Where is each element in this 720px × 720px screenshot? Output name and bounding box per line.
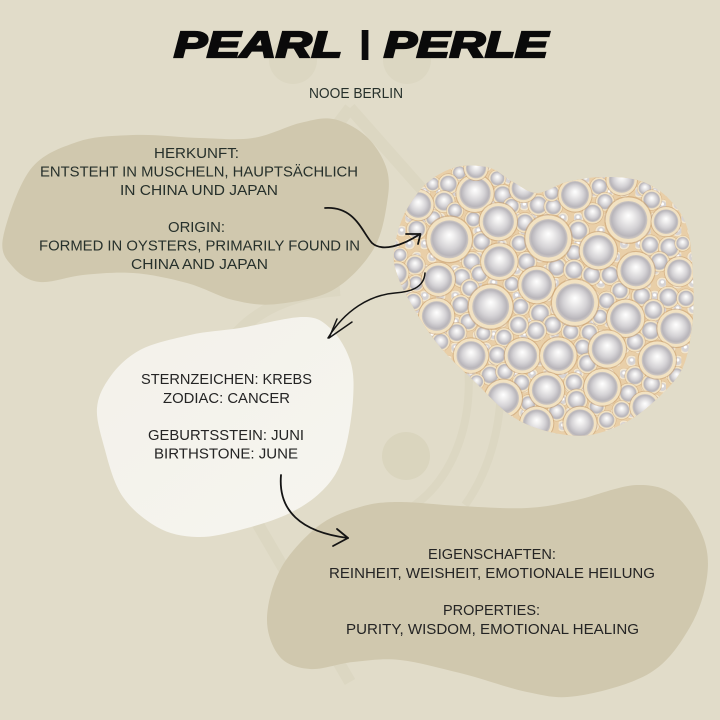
small pearls <box>389 165 696 430</box>
subtitle: NOOE BERLIN <box>309 86 403 102</box>
zodiac blob <box>97 317 354 537</box>
origin text: FORMED IN OYSTERS, PRIMARILY FOUND IN <box>39 238 360 254</box>
zodiac text <box>141 371 312 463</box>
watermark: faint eye and diamond emblem <box>210 36 520 682</box>
origin text: HERKUNFT: <box>154 145 239 162</box>
properties text: REINHEIT, WEISHEIT, EMOTIONALE HEILUNG <box>329 565 655 582</box>
properties text: PURITY, WISDOM, EMOTIONAL HEALING <box>346 621 639 638</box>
panel: origin <box>2 118 389 305</box>
panel: zodiac and birthstone <box>97 317 354 537</box>
properties text <box>329 546 655 638</box>
origin text: CHINA AND JAPAN <box>131 256 268 273</box>
properties blob <box>267 485 708 697</box>
title: PEARL <box>174 24 342 65</box>
title: | <box>360 28 369 60</box>
zodiac text: ZODIAC: CANCER <box>163 390 290 407</box>
title <box>174 24 549 65</box>
zodiac text: STERNZEICHEN: KREBS <box>141 371 312 388</box>
arrow: zodiac to properties <box>281 475 348 546</box>
origin text: ENTSTEHT IN MUSCHELN, HAUPTSÄCHLICH <box>40 164 358 181</box>
arrow: origin to photo <box>325 208 420 247</box>
photo: pearls in organic blob <box>384 156 700 441</box>
properties text: EIGENSCHAFTEN: <box>428 546 556 563</box>
origin text: ORIGIN: <box>168 219 225 236</box>
arrow: photo to zodiac <box>328 273 425 338</box>
zodiac text: BIRTHSTONE: JUNE <box>154 446 298 463</box>
large pearls <box>384 156 696 441</box>
panel: properties <box>267 485 708 697</box>
properties text: PROPERTIES: <box>443 602 540 619</box>
origin text <box>39 145 360 273</box>
origin text: IN CHINA UND JAPAN <box>120 182 278 199</box>
title: PERLE <box>384 24 549 65</box>
origin blob <box>2 118 389 305</box>
zodiac text: GEBURTSSTEIN: JUNI <box>148 427 304 444</box>
